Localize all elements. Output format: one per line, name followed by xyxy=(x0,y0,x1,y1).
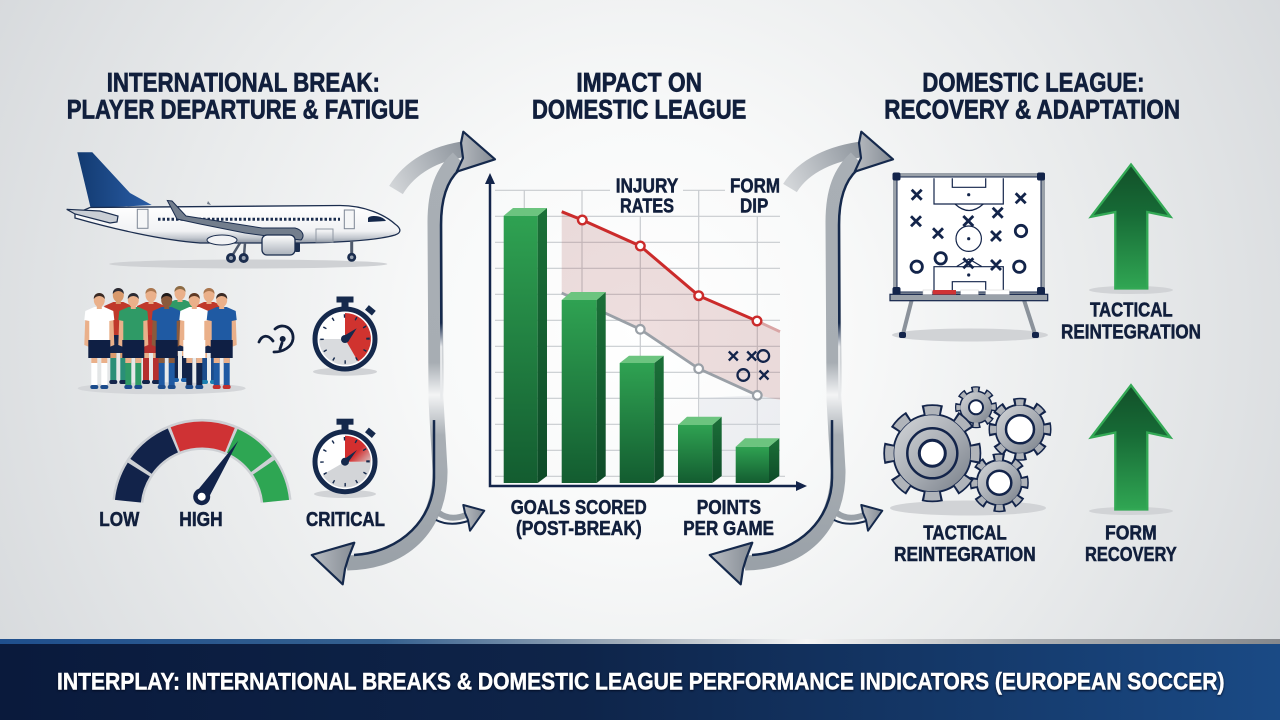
label: tactical reintegration lower xyxy=(894,521,1036,566)
gauge label: low: LOW xyxy=(99,508,140,531)
icon: squiggle connector xyxy=(259,326,293,352)
icon: squad of players xyxy=(78,286,246,394)
chart label: points per game: POINTS xyxy=(697,496,761,519)
gear: large xyxy=(889,410,975,496)
gear: right xyxy=(993,402,1047,456)
title: domestic league recovery xyxy=(884,68,1180,124)
title: international break: INTERNATIONAL BREAK: xyxy=(107,68,380,98)
chart label: form dip: DIP xyxy=(740,194,768,217)
title: international break: PLAYER DEPARTURE & FATIGUE xyxy=(67,94,419,124)
icon: tactics whiteboard xyxy=(890,172,1048,342)
red line xyxy=(562,212,780,332)
gear: bottom xyxy=(974,458,1024,508)
chart label: points per game xyxy=(683,496,774,540)
green bars xyxy=(504,208,779,483)
chart label: injury rates: RATES xyxy=(620,194,674,217)
chart label: form dip xyxy=(730,174,780,217)
stopwatch label: critical: CRITICAL xyxy=(306,508,385,531)
icon: stopwatch two xyxy=(314,419,376,498)
gauge label: high: HIGH xyxy=(179,508,223,531)
title: domestic league recovery: DOMESTIC LEAGUE: xyxy=(922,68,1144,98)
arrows: left connector xyxy=(312,132,495,584)
area between lines xyxy=(562,212,780,400)
grey line xyxy=(562,293,762,400)
chart: impact bars and lines xyxy=(485,173,807,491)
label: tactical reintegration lower: REINTEGRATION xyxy=(894,543,1036,566)
tactical marks xyxy=(729,350,769,381)
chart label: points per game: PER GAME xyxy=(683,517,774,540)
icon: green up arrow one xyxy=(1089,164,1173,294)
title: impact on domestic league xyxy=(532,68,746,124)
chart label: form dip: FORM xyxy=(730,174,780,197)
label: form recovery xyxy=(1085,521,1177,566)
title: impact on domestic league: IMPACT ON xyxy=(576,68,702,98)
chart label: goals scored: (POST-BREAK) xyxy=(516,517,642,540)
icon: fatigue gauge xyxy=(128,434,276,505)
chart label: goals scored: GOALS SCORED xyxy=(511,496,647,519)
icon: green up arrow two xyxy=(1089,385,1173,515)
chart label: injury rates xyxy=(616,174,679,217)
gear: small top xyxy=(958,390,994,425)
label: tactical reintegration upper: REINTEGRATION xyxy=(1061,320,1201,343)
arrows: right connector xyxy=(710,132,893,584)
label: tactical reintegration lower: TACTICAL xyxy=(923,521,1007,544)
player marks xyxy=(911,190,1027,272)
chart label: injury rates: INJURY xyxy=(616,174,679,197)
title: impact on domestic league: DOMESTIC LEAGUE xyxy=(532,94,746,124)
icon: gears xyxy=(889,390,1047,516)
label: form recovery: FORM xyxy=(1105,521,1157,544)
lower shaded area xyxy=(700,395,780,476)
chart label: goals scored xyxy=(511,496,647,540)
label: tactical reintegration upper: TACTICAL xyxy=(1090,299,1173,322)
footer banner xyxy=(0,639,1280,720)
title: domestic league recovery: RECOVERY & ADAPTATION xyxy=(884,94,1180,124)
chart axes xyxy=(485,173,807,491)
icon: stopwatch one xyxy=(313,296,377,376)
title: international break xyxy=(67,68,419,124)
label: form recovery: RECOVERY xyxy=(1085,543,1177,566)
pitch markings xyxy=(934,178,1003,290)
label: tactical reintegration upper xyxy=(1061,299,1201,343)
icon: airplane xyxy=(67,152,400,268)
